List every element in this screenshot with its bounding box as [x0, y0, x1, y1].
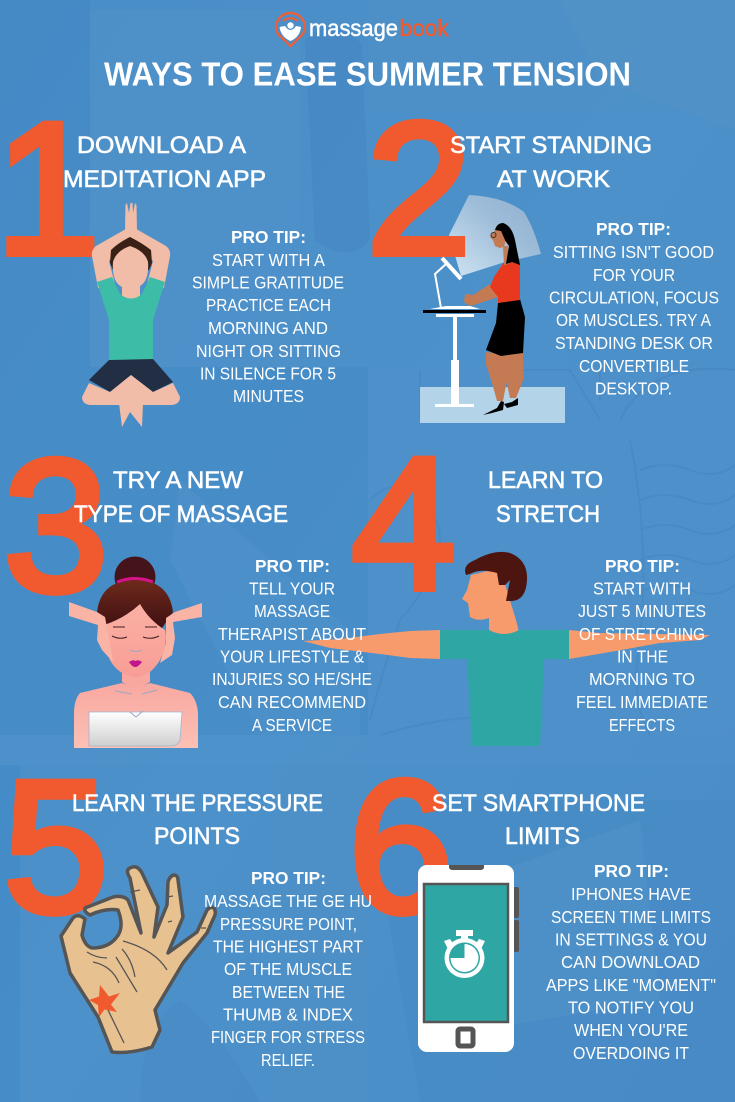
pro tip text: START WITH — [593, 578, 691, 598]
pro tip text: INJURIES SO HE/SHE — [212, 669, 372, 689]
pro tip text: MORNING AND — [208, 318, 328, 338]
pro tip text: PRO TIP: — [251, 868, 326, 888]
pro tip text: PRESSURE POINT, — [220, 914, 357, 934]
icon: star — [89, 985, 120, 1017]
number 6: 6 — [348, 742, 453, 952]
number 4: 4 — [352, 418, 456, 628]
number 3: 3 — [4, 420, 108, 630]
pro tip text: IN THE — [617, 646, 668, 666]
number 5: 5 — [4, 742, 108, 952]
panel: tip 3 new type of massage — [4, 420, 372, 748]
pro tip text: JUST 5 MINUTES — [578, 601, 706, 621]
pro tip text: PRACTICE EACH — [206, 295, 331, 315]
pro tip text: START WITH A — [212, 250, 325, 270]
pro tip text: WHEN YOU'RE — [574, 1020, 688, 1040]
pro tip text: MORNING TO — [589, 669, 695, 689]
panel: tip 2 standing at work — [366, 84, 719, 423]
pro tip text: PRO TIP: — [596, 219, 671, 239]
heading — [74, 467, 288, 528]
pro tip text: CAN DOWNLOAD — [561, 952, 700, 972]
pro tip text: OF THE MUSCLE — [224, 959, 352, 979]
light beam — [449, 195, 541, 276]
pro tip text: NIGHT OR SITTING — [196, 341, 341, 361]
pro tip text: SCREEN TIME LIMITS — [551, 907, 711, 927]
icon: woman at standing desk — [420, 223, 565, 423]
pro tip text: DESKTOP. — [595, 378, 672, 398]
pro tip text: A SERVICE — [252, 715, 332, 735]
pro tip text: THERAPIST ABOUT — [218, 624, 366, 644]
heading: START STANDING — [450, 132, 652, 159]
pro tip text: THUMB & INDEX — [223, 1004, 353, 1024]
panel: tip 4 learn to stretch — [303, 418, 710, 746]
pro tip text: FEEL IMMEDIATE — [576, 692, 708, 712]
panel: tip 5 pressure points — [4, 742, 372, 1070]
heading: SET SMARTPHONE — [432, 790, 645, 817]
pro tip text: CAN RECOMMEND — [218, 692, 366, 712]
icon: meditating man — [82, 203, 180, 427]
icon: smartphone with stopwatch — [418, 865, 519, 1052]
pro tip text — [546, 861, 716, 1063]
logo: book — [400, 15, 449, 41]
icon: woman receiving facial massage — [69, 556, 202, 748]
pro tip text: OF STRETCHING — [579, 624, 705, 644]
heading: DOWNLOAD A — [77, 132, 247, 159]
pro tip text: CONVERTIBLE — [579, 356, 689, 376]
pro tip text: THE HIGHEST PART — [213, 936, 363, 956]
logo — [276, 13, 449, 46]
heading: STRETCH — [496, 501, 600, 528]
pro tip text: SIMPLE GRATITUDE — [192, 272, 344, 292]
number 2: 2 — [366, 84, 471, 294]
icon: hand with pressure point — [61, 867, 215, 1052]
pro tip text: IN SETTINGS & YOU — [555, 930, 707, 950]
pro tip text: APPS LIKE "MOMENT" — [546, 975, 716, 995]
pro tip text: PRO TIP: — [605, 556, 680, 576]
pro tip text: MASSAGE — [254, 601, 330, 621]
heading — [63, 132, 266, 193]
pro tip text: EFFECTS — [609, 715, 675, 735]
heading: MEDITATION APP — [63, 166, 266, 193]
heading: POINTS — [154, 823, 240, 850]
pro tip text — [204, 868, 372, 1070]
pro tip text: STANDING DESK OR — [555, 333, 713, 353]
pro tip text: FINGER FOR STRESS — [211, 1027, 365, 1047]
heading: LEARN THE PRESSURE — [72, 790, 323, 817]
pro tip text: FOR YOUR — [593, 265, 675, 285]
heading — [450, 132, 652, 193]
pro tip text: TELL YOUR — [249, 578, 335, 598]
icon: man stretching arms — [303, 552, 710, 746]
pro tip text: OR MUSCLES. TRY A — [556, 310, 711, 330]
heading — [432, 790, 645, 850]
heading: LEARN TO — [488, 467, 603, 494]
pro tip text: PRO TIP: — [594, 861, 669, 881]
icon: location pin — [276, 13, 305, 46]
heading — [488, 467, 603, 528]
panel: tip 6 smartphone limits — [348, 742, 716, 1063]
pro tip text — [549, 219, 719, 398]
pro tip text: RELIEF. — [261, 1050, 315, 1070]
title: WAYS TO EASE SUMMER TENSION — [104, 56, 631, 92]
heading: LIMITS — [505, 823, 580, 850]
heading: TYPE OF MASSAGE — [74, 501, 288, 528]
pro tip text: MINUTES — [233, 386, 304, 406]
heading: AT WORK — [497, 166, 611, 193]
heading — [72, 790, 323, 850]
pro tip text — [192, 227, 344, 406]
pro tip text: CIRCULATION, FOCUS — [549, 288, 719, 308]
heading: TRY A NEW — [113, 467, 244, 494]
icon: stopwatch — [444, 930, 485, 978]
pro tip text: YOUR LIFESTYLE & — [220, 646, 364, 666]
pro tip text: IN SILENCE FOR 5 — [200, 364, 336, 384]
pro tip text: OVERDOING IT — [573, 1043, 689, 1063]
pro tip text: PRO TIP: — [255, 556, 330, 576]
pro tip text: SITTING ISN'T GOOD — [553, 242, 714, 262]
pro tip text: IPHONES HAVE — [571, 884, 691, 904]
pro tip text: TO NOTIFY YOU — [568, 998, 694, 1018]
panel: tip 1 meditation app — [0, 84, 344, 427]
pro tip text: BETWEEN THE — [232, 982, 345, 1002]
pro tip text: PRO TIP: — [231, 227, 306, 247]
pro tip text — [576, 556, 708, 735]
logo: massage — [309, 15, 398, 41]
pro tip text: MASSAGE THE GE HU — [204, 891, 372, 911]
pro tip text — [212, 556, 372, 735]
